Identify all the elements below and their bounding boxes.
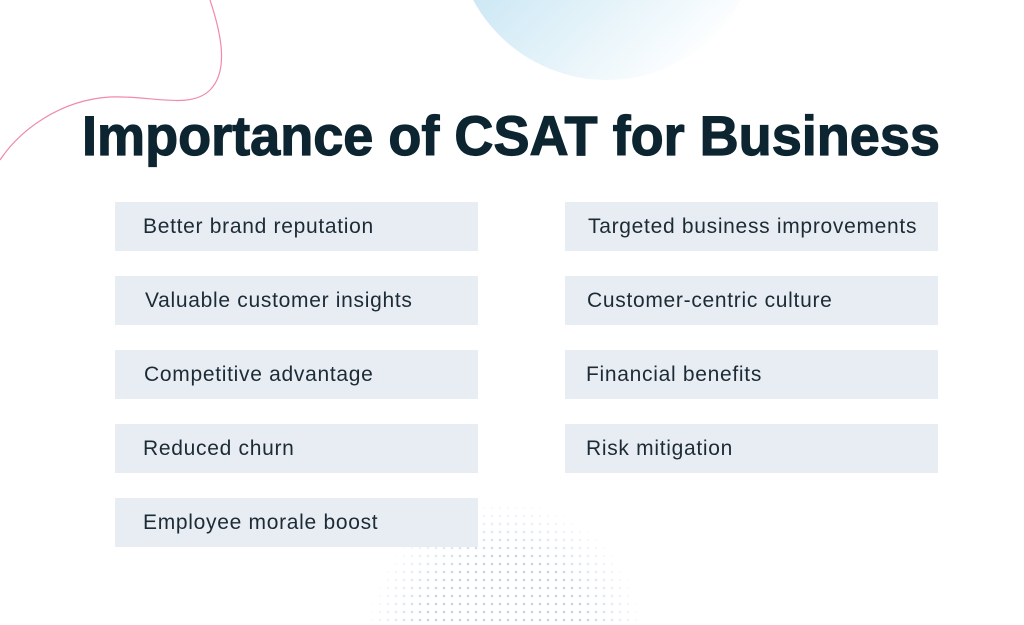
title: Importance of CSAT for Business	[82, 104, 940, 167]
item: Better brand reputation: Better brand reputation	[143, 215, 374, 238]
item: Targeted business improvements: Targeted business improvements	[588, 215, 917, 238]
item: Reduced churn: Reduced churn	[143, 437, 295, 460]
dot pattern	[378, 507, 636, 622]
item: Valuable customer insights	[115, 276, 478, 325]
item: Reduced churn	[115, 424, 478, 473]
item: Risk mitigation: Risk mitigation	[586, 437, 733, 460]
blue circle	[455, 0, 759, 80]
item: Risk mitigation	[565, 424, 938, 473]
item: Financial benefits	[565, 350, 938, 399]
item: Better brand reputation	[115, 202, 478, 251]
item: Employee morale boost	[115, 498, 478, 547]
item: Valuable customer insights: Valuable customer insights	[145, 289, 413, 312]
item: Customer-centric culture: Customer-centric culture	[587, 289, 833, 312]
item: Financial benefits: Financial benefits	[586, 363, 762, 386]
decorative background	[0, 0, 722, 622]
item: Employee morale boost: Employee morale boost	[143, 511, 378, 534]
item: Targeted business improvements	[565, 202, 938, 251]
item: Competitive advantage	[115, 350, 478, 399]
item: Customer-centric culture	[565, 276, 938, 325]
pink curve	[0, 0, 222, 160]
item: Competitive advantage: Competitive advantage	[144, 363, 374, 386]
